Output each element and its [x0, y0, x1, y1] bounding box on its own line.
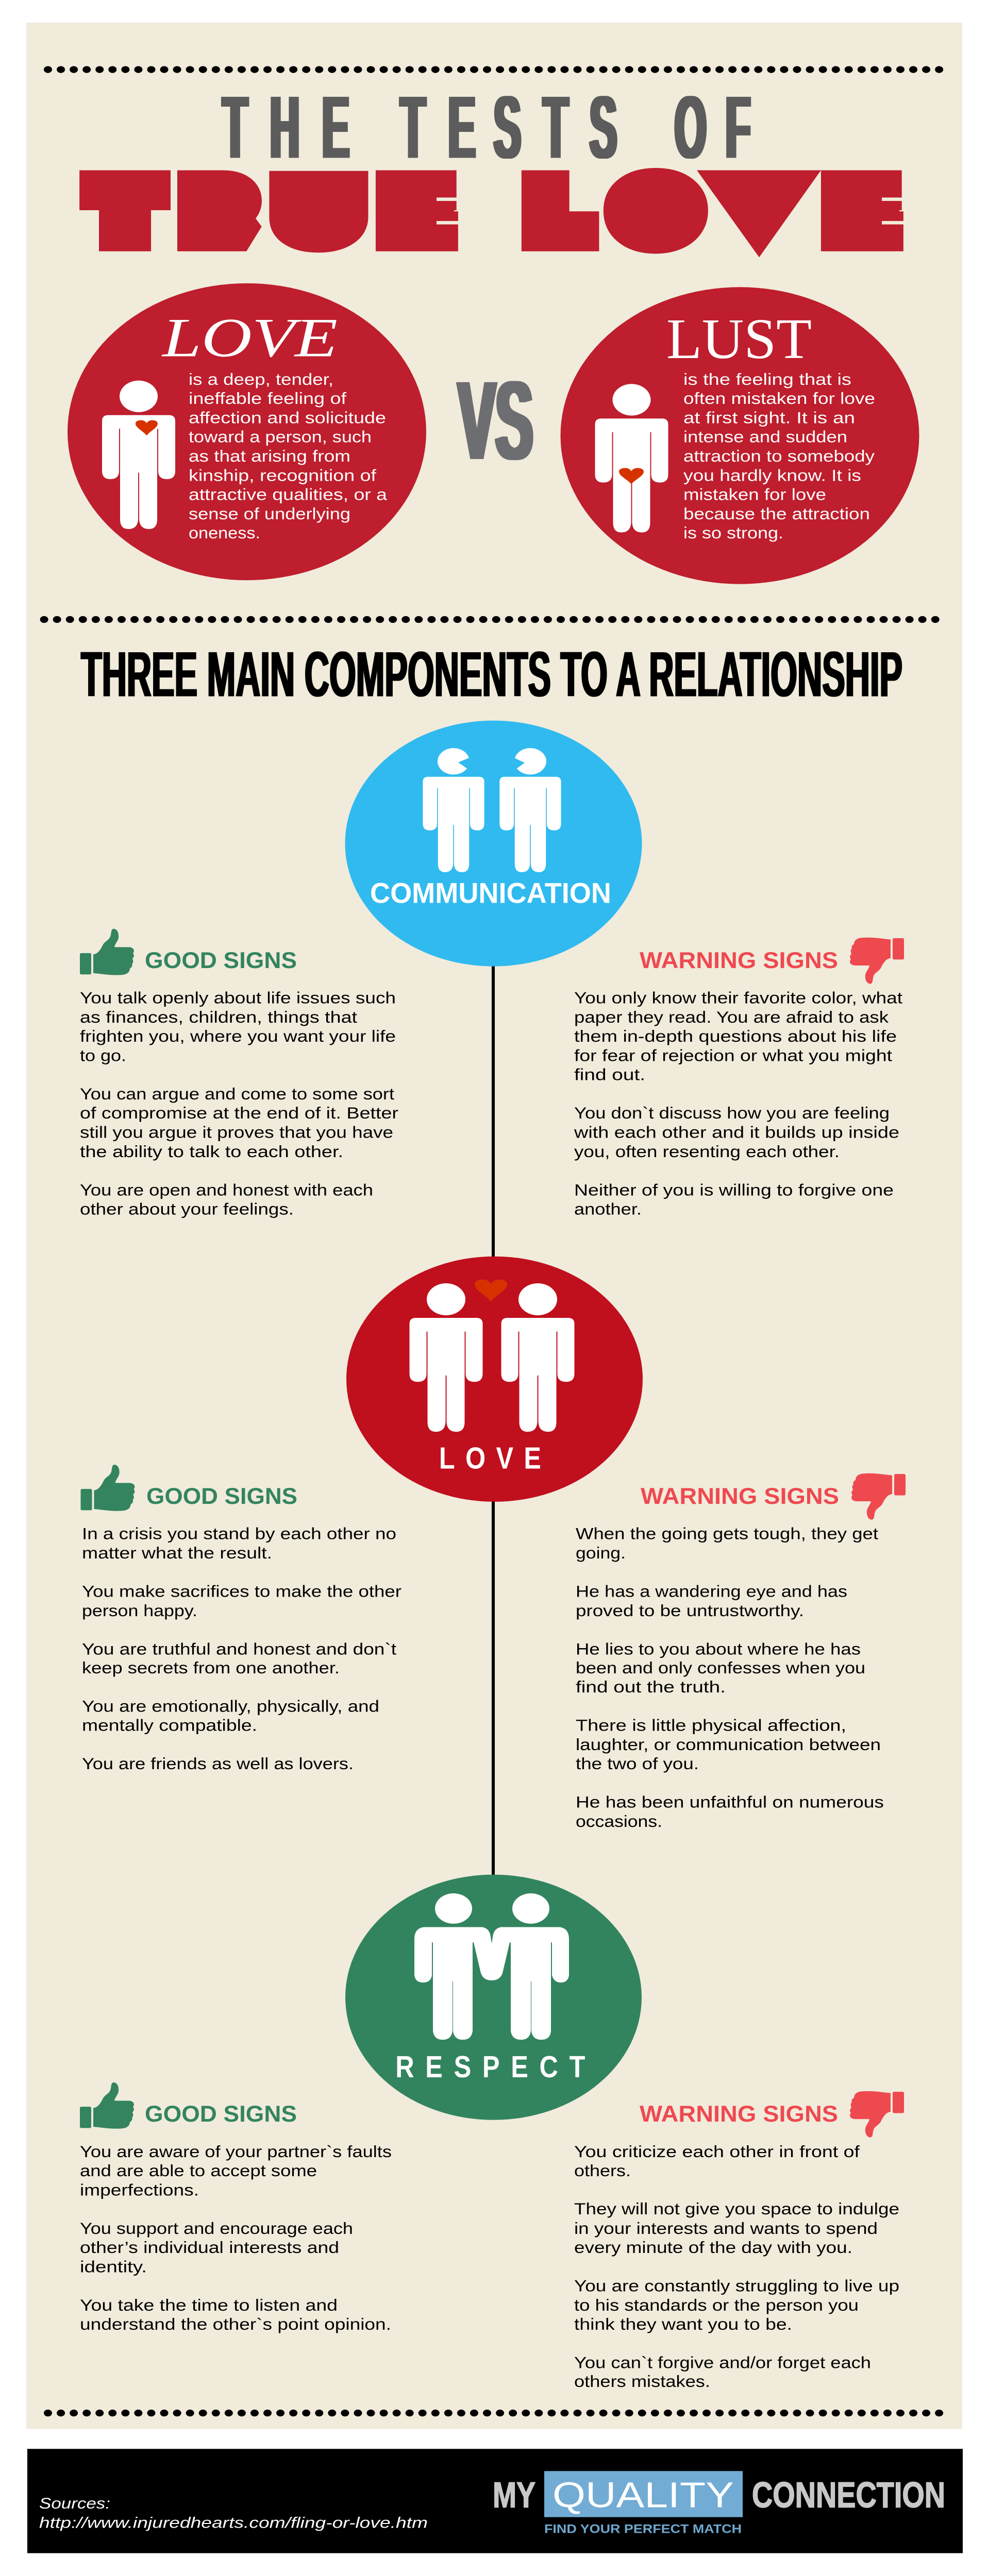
text: love warning signs: laughter, or communication between [576, 1736, 881, 1754]
text: communication warning signs: paper they read. You are afraid to ask [574, 1008, 889, 1026]
label: respect: RESPECT [395, 2049, 596, 2084]
text: love definition: sense of underlying [189, 505, 350, 523]
heading: lust: LUST [666, 307, 812, 370]
text: love warning signs: He has a wandering eye and has [576, 1583, 847, 1601]
title: true love: E [389, 171, 443, 250]
text: communication warning signs [574, 989, 902, 1218]
text: lust definition: you hardly know. It is [683, 466, 861, 484]
text: lust definition: is the feeling that is [683, 370, 851, 388]
text: communication good signs: the ability to talk to each other. [80, 1143, 343, 1161]
text: respect warning signs: You criticize each other in front of [574, 2143, 860, 2161]
text: love warning signs: going. [576, 1544, 626, 1562]
logo: my quality connection: MY [493, 2475, 535, 2515]
text: love warning signs: When the going gets tough, they get [576, 1525, 878, 1543]
text: respect good signs [80, 2143, 392, 2333]
text: respect good signs: You support and encourage each [80, 2219, 353, 2238]
title: true love: V [718, 165, 799, 257]
text: communication good signs: You can argue and come to some sort [80, 1085, 394, 1103]
sources: Sources: [39, 2495, 110, 2512]
text: lust definition: because the attraction [683, 505, 870, 523]
title: true love: O [620, 170, 691, 252]
section: communication circle [345, 721, 642, 967]
text: love good signs: mentally compatible. [82, 1717, 257, 1735]
text: communication good signs [80, 989, 398, 1218]
title: true love: E [834, 171, 888, 250]
text: communication warning signs: You don`t discuss how you are feeling [574, 1104, 890, 1122]
text: communication good signs: to go. [80, 1046, 126, 1065]
text: respect warning signs: They will not give you space to indulge [574, 2200, 899, 2218]
heading: good signs: GOOD SIGNS [145, 2100, 297, 2127]
text: love definition: attractive qualities, or a [189, 486, 388, 504]
text: communication warning signs: Neither of you is willing to forgive one [574, 1181, 894, 1199]
text: love warning signs: been and only confesses when you [576, 1659, 865, 1677]
text: love warning signs: He has been unfaithful on numerous [576, 1793, 884, 1811]
text: love good signs: You are friends as well as lovers. [82, 1755, 354, 1773]
title: true love: L [534, 171, 583, 251]
footer bar [27, 2449, 963, 2553]
text: love definition: toward a person, such [189, 428, 372, 446]
text: communication good signs: other about your feelings. [80, 1200, 294, 1218]
text: respect warning signs: every minute of the day with you. [574, 2239, 852, 2257]
text: communication warning signs: you, often resenting each other. [574, 1143, 840, 1161]
text: love warning signs: There is little physical affection, [576, 1717, 846, 1735]
section: love circle [346, 1257, 643, 1502]
text: love good signs: matter what the result. [82, 1544, 272, 1562]
panel: lust definition [561, 287, 919, 584]
text: love warning signs: proved to be untrustworthy. [576, 1602, 804, 1620]
text: love definition: oneness. [189, 524, 260, 542]
sources [39, 2495, 428, 2532]
text: communication warning signs: with each other and it builds up inside [574, 1124, 899, 1142]
text: respect warning signs [574, 2143, 899, 2391]
text: communication warning signs: for fear of rejection or what you might [574, 1046, 892, 1065]
text: love definition: kinship, recognition of [189, 466, 376, 484]
heading: warning signs: WARNING SIGNS [640, 947, 838, 973]
text: love warning signs: find out the truth. [576, 1678, 726, 1696]
heading: good signs: GOOD SIGNS [146, 1483, 297, 1509]
text: love warning signs: the two of you. [576, 1755, 699, 1773]
icon: person with heart at groin [595, 384, 668, 532]
text: respect good signs: You take the time to listen and [80, 2296, 338, 2314]
text: respect good signs: understand the other`s point opinion. [80, 2315, 391, 2333]
text: love definition: as that arising from [189, 447, 350, 465]
text: love warning signs: He lies to you about where he has [576, 1640, 861, 1658]
text: love good signs [82, 1525, 401, 1773]
label: love: LOVE [439, 1440, 551, 1475]
text: communication good signs: frighten you, where you want your life [80, 1027, 396, 1045]
text: lust definition: mistaken for love [683, 486, 826, 504]
text: communication warning signs: find out. [574, 1066, 645, 1084]
icon: two people with heart [409, 1279, 574, 1432]
text: respect warning signs: others. [574, 2162, 631, 2180]
title: true love [98, 165, 903, 257]
text: love definition: is a deep, tender, [189, 370, 333, 388]
text: communication good signs: You are open and honest with each [80, 1181, 373, 1199]
text: love good signs: keep secrets from one another. [82, 1659, 340, 1677]
heading: good signs: GOOD SIGNS [145, 947, 297, 973]
text: respect good signs: other’s individual interests and [80, 2239, 339, 2257]
text: love good signs: You make sacrifices to make the other [82, 1583, 401, 1601]
icon: thumbs down [850, 2091, 904, 2138]
text: love definition: ineffable feeling of [189, 389, 346, 408]
panel: love definition [68, 283, 426, 580]
infographic canvas: VS [458, 358, 533, 483]
text: love good signs: You are truthful and honest and don`t [82, 1640, 396, 1658]
text: lust definition: often mistaken for love [683, 389, 875, 408]
title: true love: R [190, 171, 248, 251]
text: lust definition [683, 370, 875, 542]
text: love good signs: You are emotionally, physically, and [82, 1697, 379, 1716]
text: love good signs: person happy. [82, 1602, 197, 1620]
icon: thumbs up [80, 929, 134, 975]
icon: thumbs down [850, 938, 904, 984]
text: love definition: affection and solicitude [189, 409, 386, 427]
label: communication: COMMUNICATION [370, 877, 611, 909]
text: communication good signs: You talk openly about life issues such [80, 989, 396, 1007]
text: respect warning signs: to his standards or the person you [574, 2296, 859, 2314]
heading: love: LOVE [161, 307, 338, 368]
title: the tests of: THE TESTS OF [223, 78, 750, 177]
title: true love: T [98, 171, 152, 250]
text: love warning signs: occasions. [576, 1812, 662, 1831]
icon: person with heart at chest [102, 381, 175, 529]
text: respect warning signs: think they want you to be. [574, 2315, 792, 2333]
text: respect warning signs: in your interests and wants to spend [574, 2219, 878, 2238]
text: lust definition: at first sight. It is an [683, 409, 855, 427]
text: respect good signs: and are able to accept some [80, 2162, 317, 2180]
text: lust definition: attraction to somebody [683, 447, 875, 465]
text: love good signs: In a crisis you stand by each other no [82, 1525, 396, 1543]
text: communication good signs: of compromise at the end of it. Better [80, 1104, 398, 1122]
text: respect good signs: identity. [80, 2258, 147, 2276]
text: lust definition: intense and sudden [683, 428, 847, 446]
text: communication good signs: as finances, children, things that [80, 1008, 357, 1026]
text: respect warning signs: You are constantly struggling to live up [574, 2277, 899, 2295]
text: respect warning signs: You can`t forgive and/or forget each [574, 2354, 871, 2372]
heading: warning signs: WARNING SIGNS [640, 2100, 838, 2127]
title: true love: U [284, 172, 353, 251]
text: love definition [189, 370, 388, 542]
icon: two people holding hands [414, 1893, 569, 2040]
section: respect circle [345, 1875, 642, 2120]
connector line: communication to love [492, 960, 495, 1263]
text: communication warning signs: You only know their favorite color, what [574, 989, 902, 1007]
text: love warning signs [576, 1525, 884, 1831]
connector line: love to respect [492, 1495, 495, 1879]
icon: thumbs down [851, 1473, 906, 1520]
logo: my quality connection [493, 2471, 945, 2536]
text: lust definition: is so strong. [683, 524, 783, 542]
text: communication good signs: still you argue it proves that you have [80, 1124, 393, 1142]
heading: warning signs: WARNING SIGNS [641, 1483, 839, 1509]
icon: two people talking [423, 748, 561, 872]
sources: http://www.injuredhearts.com/fling-or-love.htm [39, 2514, 428, 2532]
text: communication warning signs: another. [574, 1200, 642, 1218]
text: respect good signs: You are aware of your partner`s faults [80, 2143, 392, 2161]
icon: thumbs up [80, 2082, 134, 2129]
text: respect good signs: imperfections. [80, 2181, 199, 2199]
text: respect warning signs: others mistakes. [574, 2372, 710, 2391]
icon: thumbs up [80, 1465, 135, 1511]
text: communication warning signs: them in-depth questions about his life [574, 1027, 897, 1045]
logo: my quality connection: FIND YOUR PERFECT MATCH [544, 2522, 742, 2536]
logo: my quality connection: QUALITY [552, 2475, 734, 2515]
